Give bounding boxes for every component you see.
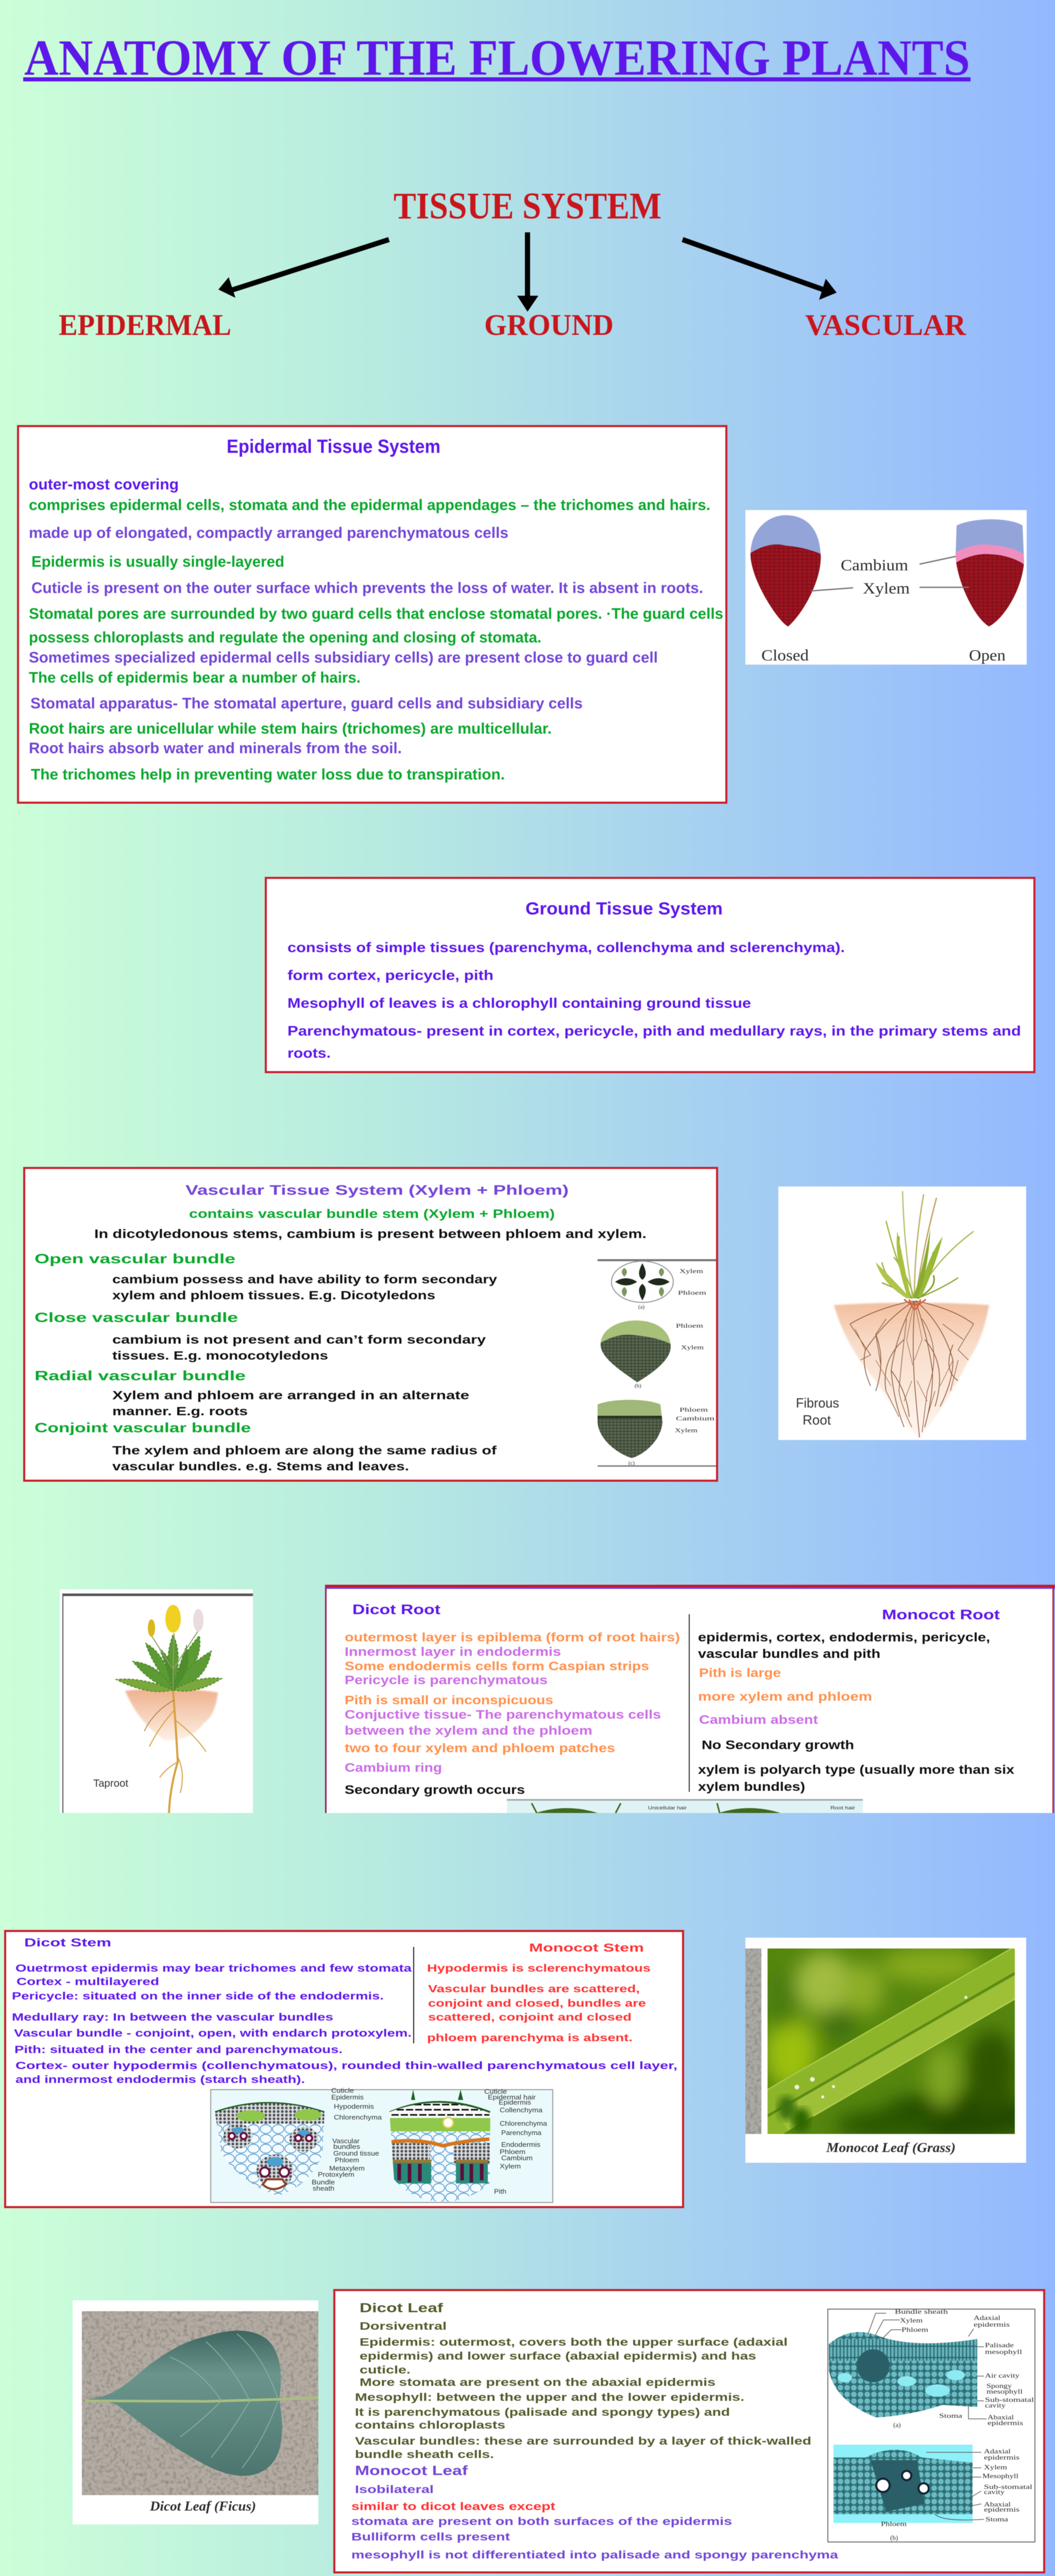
text block: monocot root: epidermis, cortex, endodermis, pericycle,	[698, 1631, 990, 1645]
text block: close vascular bundle	[35, 1310, 486, 1362]
image: monocot leaf (grass)	[745, 1938, 1041, 2163]
panel: epidermal tissue system	[18, 426, 726, 803]
labels: bundle parts: Closed	[761, 646, 809, 664]
diagram: conjoint bundle (c): Xylem	[675, 1427, 698, 1434]
gravel strip	[745, 1948, 761, 2134]
labels: dicot stem parts: Phloem	[335, 2156, 359, 2164]
text block: ground facts: form cortex, pericycle, pith	[287, 968, 494, 983]
diagram: stem cross sections	[211, 2087, 553, 2205]
panel: dicot and monocot root	[325, 1585, 1055, 1813]
diagram: radial bundle (a): (a)	[638, 1304, 645, 1310]
diagram: closed bundle (b): Xylem	[681, 1344, 704, 1351]
diagram: conjoint bundle (c): (c)	[628, 1460, 635, 1466]
diagram: leaf cross sections	[827, 2308, 1035, 2542]
text block: conjoint vascular bundle	[35, 1420, 497, 1473]
labels: section (b) parts: Stoma	[985, 2515, 1008, 2523]
text block: close vascular bundle: cambium is not present and can’t form secondary	[112, 1333, 486, 1346]
labels: section (b) parts: epidermis	[984, 2505, 1019, 2513]
text block: epidermal facts: Cuticle is present on the outer surface which prevents the loss of water. It is absent in roots.	[31, 580, 703, 597]
text block: epidermal facts: made up of elongated, compactly arranged parenchymatous cells	[29, 524, 508, 541]
text block: epidermal facts: Root hairs absorb water and minerals from the soil.	[29, 740, 402, 757]
labels: section (a) parts: Stoma	[939, 2412, 962, 2419]
text block: conjoint vascular bundle: The xylem and phloem are along the same radius of	[112, 1444, 497, 1457]
soil	[125, 1689, 218, 1740]
labels: section (a) parts: Spongy	[986, 2382, 1012, 2389]
section (a): dorsiventral leaf	[827, 2313, 986, 2419]
text block: monocot stem	[427, 1963, 651, 2044]
text block: monocot stem: phloem parenchyma is absent.	[427, 2032, 633, 2044]
text block: epidermal facts	[29, 476, 723, 783]
diagram: conjoint bundle (c): Cambium	[676, 1415, 715, 1422]
text block: dicot leaf: Dicot Leaf	[360, 2301, 444, 2315]
diagram: radial bundle (a): Xylem	[679, 1267, 704, 1275]
text block: dicot stem: Pericycle: situated on the inner side of the endodermis.	[12, 1991, 384, 2002]
text block: dicot leaf: epidermis) and lower surface (abaxial epidermis) and has	[360, 2350, 756, 2362]
text block: close vascular bundle: tissues. E.g. monocotyledons	[112, 1349, 328, 1362]
labels: monocot stem parts: Phloem	[500, 2148, 525, 2156]
labels: section (b) parts: Phloem	[881, 2520, 907, 2528]
text block: dicot stem: and innermost endodermis (starch sheath).	[15, 2074, 305, 2086]
labels: dicot stem parts: bundles	[333, 2143, 361, 2150]
panel: dicot and monocot leaf	[334, 2290, 1044, 2572]
image: dicot leaf (ficus)	[73, 2300, 318, 2524]
labels: monocot stem parts: Pith	[494, 2188, 506, 2195]
text block: epidermal facts: Sometimes specialized epidermal cells subsidiary cells) are present close to guard cell	[29, 649, 658, 666]
text block: monocot root: No Secondary growth	[702, 1738, 854, 1752]
labels: bundle parts: Xylem	[863, 579, 910, 597]
labels: monocot stem parts: Collenchyma	[500, 2106, 543, 2114]
diagram: vascular bundle types	[595, 1259, 716, 1467]
text block: dicot leaf: It is parenchymatous (palisade and spongy types) and	[355, 2406, 730, 2418]
diagram: closed bundle	[750, 515, 821, 627]
text block: close vascular bundle: Close vascular bundle	[35, 1310, 238, 1325]
text block: monocot root: xylem is polyarch type (usually more than six	[698, 1763, 1015, 1777]
labels: section (a) parts: epidermis	[974, 2320, 1010, 2328]
heading: dicot root: Dicot Root	[352, 1602, 440, 1617]
label: fibrous root: Fibrous	[796, 1395, 839, 1411]
labels: section (a) parts: epidermis	[988, 2419, 1023, 2427]
text block: dicot root: Innermost layer in endodermis	[345, 1645, 561, 1659]
labels: section (a) parts: Sub-stomatal	[985, 2396, 1034, 2403]
labels: section (b) parts: epidermis	[984, 2453, 1019, 2461]
text block: monocot leaf: Monocot Leaf	[355, 2463, 468, 2478]
labels: monocot stem parts: Epidermal hair	[488, 2093, 536, 2101]
text block: dicot stem: Cortex- outer hypodermis (collenchymatous), rounded thin-walled parenchymatous cell layer,	[15, 2060, 677, 2072]
section (b): isobilateral leaf	[833, 2445, 984, 2523]
text block: ground facts: Parenchymatous- present in cortex, pericycle, pith and medullary rays, in the primary stems and	[287, 1023, 1021, 1039]
diagram: radial bundle (a)	[611, 1261, 707, 1310]
labels: section (a) parts: Palisade	[985, 2341, 1014, 2349]
photo: grass blade	[765, 1946, 1041, 2143]
labels: section (b) parts: Xylem	[984, 2463, 1007, 2471]
text block: dicot leaf: Vascular bundles: these are surrounded by a layer of thick-walled	[355, 2435, 811, 2447]
image: fibrous root plant	[778, 1187, 1026, 1440]
diagram: root sections (cropped): Unicellular hair	[648, 1805, 687, 1810]
text block: open vascular bundle	[35, 1251, 497, 1302]
labels: dicot stem parts: Ground tissue	[333, 2149, 379, 2157]
text block: monocot stem: Hypodermis is sclerenchymatous	[427, 1963, 651, 1974]
text block: ground facts: roots.	[287, 1045, 331, 1061]
label: epidermal: EPIDERMAL	[59, 308, 231, 342]
labels: section (a) parts: Adaxial	[974, 2314, 1000, 2321]
arrow: to vascular	[683, 240, 837, 300]
labels: section (a) parts: Air cavity	[985, 2371, 1020, 2379]
text block: monocot leaf: similar to dicot leaves except	[351, 2501, 555, 2513]
text block: epidermal facts: outer-most covering	[29, 476, 179, 493]
labels: monocot stem parts: Endodermis	[501, 2141, 541, 2148]
monocot stem section	[386, 2092, 495, 2205]
labels: section (b) parts: Sub-stomatal	[984, 2483, 1033, 2490]
labels: section (b) parts	[881, 2447, 1033, 2541]
caption: Dicot Leaf (Ficus)	[149, 2499, 256, 2514]
text block: radial vascular bundle: manner. E.g. roots	[112, 1404, 248, 1418]
title: ANATOMY OF THE FLOWERING PLANTS	[24, 30, 970, 86]
labels: section (a) parts: Xylem	[900, 2316, 923, 2324]
text block: monocot root: more xylem and phloem	[698, 1690, 872, 1704]
labels: dicot stem parts: Chlorenchyma	[334, 2113, 382, 2121]
panel: vascular tissue system	[24, 1168, 717, 1481]
text block: monocot root: vascular bundles and pith	[698, 1647, 880, 1661]
labels: section (b) parts: Mesophyll	[982, 2472, 1018, 2480]
heading: monocot stem: Monocot Stem	[529, 1941, 644, 1954]
text block: dicot leaf: Dorsiventral	[360, 2320, 447, 2332]
text block: ground facts: consists of simple tissues (parenchyma, collenchyma and sclerenchyma).	[287, 940, 845, 955]
diagram: closed bundle (b): Phloem	[676, 1322, 704, 1329]
text block: dicot root: Cambium ring	[345, 1761, 442, 1775]
text block: monocot leaf: Isobilateral	[355, 2484, 434, 2496]
labels: dicot stem parts: Protoxylem	[318, 2171, 354, 2178]
labels: section (b) parts: cavity	[984, 2488, 1005, 2496]
text block: dicot root: Some endodermis cells form Caspian strips	[345, 1659, 649, 1673]
labels: section (b) parts: Adaxial	[984, 2447, 1011, 2455]
text block: radial vascular bundle	[35, 1368, 469, 1418]
arrow: to ground	[517, 232, 538, 312]
text block: dicot leaf	[355, 2301, 811, 2461]
labels: monocot stem parts: Chlorenchyma	[500, 2120, 548, 2127]
text block: dicot root: two to four xylem and phloem patches	[345, 1741, 615, 1755]
label: fibrous root	[796, 1395, 839, 1428]
photo: ficus leaf on gravel	[82, 2311, 318, 2495]
text block: dicot leaf: More stomata are present on the abaxial epidermis	[360, 2377, 716, 2388]
text block: dicot leaf: contains chloroplasts	[355, 2419, 505, 2431]
diagram: closed bundle (b): (b)	[635, 1383, 641, 1389]
text block: open vascular bundle: xylem and phloem tissues. E.g. Dicotyledons	[112, 1289, 435, 1302]
text: vascular intro	[94, 1207, 646, 1241]
flowers	[165, 1605, 181, 1633]
label: taproot: Taproot	[93, 1778, 128, 1789]
heading: monocot root: Monocot Root	[882, 1607, 1000, 1622]
labels: dicot stem parts: Metaxylem	[329, 2164, 365, 2172]
labels: section (a) parts: mesophyll	[986, 2387, 1023, 2395]
text block: epidermal facts: Stomatal pores are surrounded by two guard cells that enclose stomatal pores. ·The guard cells	[29, 605, 723, 622]
labels: section (b) parts: Abaxial	[984, 2500, 1011, 2508]
grass shoots	[876, 1191, 974, 1298]
labels: section (a) parts: cavity	[985, 2401, 1006, 2409]
label: ground: GROUND	[484, 308, 614, 342]
soil	[834, 1302, 989, 1438]
text block: dicot leaf: Mesophyll: between the upper and the lower epidermis.	[355, 2392, 744, 2403]
labels: monocot stem parts: Parenchyma	[501, 2129, 542, 2137]
text block: open vascular bundle: Open vascular bundle	[35, 1251, 235, 1266]
text block: monocot root: Pith is large	[699, 1666, 781, 1680]
text block: monocot root: Cambium absent	[699, 1713, 818, 1727]
labels: dicot stem parts: Cuticle	[331, 2087, 354, 2094]
text: vascular intro: contains vascular bundle stem (Xylem + Phloem)	[189, 1207, 555, 1221]
heading: epidermal tissue system: Epidermal Tissue System	[227, 436, 440, 457]
caption: Monocot Leaf (Grass)	[826, 2140, 956, 2155]
labels: dicot stem parts	[312, 2087, 382, 2192]
text: vascular intro: In dicotyledonous stems, cambium is present between phloem and xylem.	[94, 1227, 646, 1241]
text block: monocot leaf: mesophyll is not differentiated into palisade and spongy parenchyma	[351, 2549, 838, 2561]
text block: epidermal facts: Root hairs are unicellular while stem hairs (trichomes) are multicellular.	[29, 720, 552, 737]
text block: ground facts: Mesophyll of leaves is a chlorophyll containing ground tissue	[287, 995, 751, 1011]
text block: dicot stem	[12, 1963, 677, 2086]
labels: dicot stem parts: Epidermis	[331, 2093, 364, 2101]
labels: dicot stem parts: Hypodermis	[334, 2103, 375, 2110]
labels: dicot stem parts: Vascular	[332, 2137, 360, 2145]
text block: epidermal facts: The trichomes help in preventing water loss due to transpiration.	[31, 766, 505, 783]
labels: bundle parts: Open	[969, 646, 1006, 664]
text block: epidermal facts: comprises epidermal cells, stomata and the epidermal appendages – the trichomes and hairs.	[29, 497, 710, 514]
text block: epidermal facts: possess chloroplasts and regulate the opening and closing of stomata.	[29, 629, 541, 646]
leaves	[116, 1635, 222, 1691]
labels: section (a) parts	[893, 2308, 1034, 2429]
text block: dicot root: outermost layer is epiblema (form of root hairs)	[345, 1631, 680, 1645]
arrow: to epidermal	[218, 240, 389, 298]
heading: tissue system: TISSUE SYSTEM	[394, 185, 661, 227]
text block: monocot root	[698, 1631, 1015, 1794]
heading: dicot stem: Dicot Stem	[24, 1936, 111, 1949]
text block: dicot root	[345, 1631, 680, 1797]
text block: dicot root: Conjuctive tissue- The parenchymatous cells	[345, 1708, 661, 1722]
text block: epidermal facts: The cells of epidermis bear a number of hairs.	[29, 669, 361, 686]
labels: monocot stem parts: Epidermis	[499, 2098, 532, 2106]
panel: ground tissue system	[266, 878, 1034, 1072]
text block: monocot leaf: stomata are present on both surfaces of the epidermis	[351, 2516, 732, 2528]
text block: conjoint vascular bundle: vascular bundles. e.g. Stems and leaves.	[112, 1460, 409, 1473]
labels: dicot stem parts: Bundle	[312, 2178, 335, 2186]
diagram: radial bundle (a): Phloem	[678, 1289, 707, 1296]
label: fibrous root: Root	[803, 1412, 831, 1428]
labels: section (a) parts: (a)	[893, 2421, 900, 2429]
labels: monocot stem parts: Cuticle	[484, 2088, 507, 2095]
image: closed and open vascular bundles	[745, 510, 1028, 665]
heading: vascular tissue system: Vascular Tissue System (Xylem + Phloem)	[185, 1182, 569, 1198]
text block: monocot root: xylem bundles)	[698, 1780, 805, 1794]
text block: dicot root: between the xylem and the phloem	[345, 1724, 592, 1738]
labels: section (a) parts: Bundle sheath	[895, 2308, 948, 2315]
text block: dicot stem: Ouetrmost epidermis may bear trichomes and few stomata	[15, 1963, 412, 1974]
diagram: open bundle	[955, 519, 1025, 627]
text block: dicot leaf: bundle sheath cells.	[355, 2449, 494, 2461]
text block: monocot stem: conjoint and closed, bundles are	[428, 1998, 646, 2009]
heading: ground tissue system: Ground Tissue System	[525, 899, 723, 919]
text block: dicot stem: Vascular bundle - conjoint, open, with endarch protoxylem.	[14, 2028, 412, 2039]
text block: ground facts	[287, 940, 1021, 1061]
text block: dicot stem: Medullary ray: In between the vascular bundles	[12, 2012, 333, 2023]
image: taproot plant	[60, 1589, 253, 1813]
labels: section (b) parts: (b)	[890, 2534, 898, 2541]
diagram: root sections (cropped): Root hair	[830, 1805, 855, 1810]
diagram: closed bundle (b)	[598, 1319, 704, 1389]
labels: bundle parts: Cambium	[841, 556, 908, 574]
text block: conjoint vascular bundle: Conjoint vascular bundle	[35, 1420, 251, 1435]
text block: monocot leaf: Bulliform cells present	[351, 2531, 510, 2543]
labels: monocot stem parts	[484, 2088, 548, 2195]
labels: dicot stem parts: sheath	[313, 2184, 334, 2192]
text block: dicot root: Pith is small or inconspicuous	[345, 1693, 553, 1707]
roots	[850, 1301, 974, 1437]
labels: section (a) parts: Phloem	[901, 2326, 928, 2333]
panel: dicot and monocot stem	[5, 1931, 683, 2207]
text block: radial vascular bundle: Xylem and phloem are arranged in an alternate	[112, 1388, 469, 1402]
text block: dicot root: Secondary growth occurs	[345, 1783, 525, 1797]
labels: bundle parts	[761, 556, 1006, 664]
text block: dicot stem: Pith: situated in the center and parenchymatous.	[14, 2044, 343, 2056]
text block: monocot stem: Vascular bundles are scattered,	[428, 1984, 640, 1995]
text block: monocot stem: scattered, conjoint and closed	[428, 2012, 632, 2023]
text block: radial vascular bundle: Radial vascular bundle	[35, 1368, 246, 1383]
dicot stem section	[211, 2092, 330, 2200]
labels: section (a) parts: mesophyll	[985, 2348, 1023, 2355]
text block: open vascular bundle: cambium possess and have ability to form secondary	[112, 1273, 497, 1286]
text block: dicot leaf: Epidermis: outermost, covers both the upper surface (adaxial	[360, 2336, 788, 2348]
text block: dicot leaf: cuticle.	[360, 2364, 411, 2376]
text block: epidermal facts: Stomatal apparatus- The stomatal aperture, guard cells and subsidiary cells	[30, 695, 583, 712]
labels: monocot stem parts: Cambium	[501, 2154, 533, 2162]
diagram: conjoint bundle (c): Phloem	[679, 1406, 708, 1413]
text block: dicot root: Pericycle is parenchymatous	[345, 1673, 548, 1687]
text block: dicot stem: Cortex - multilayered	[16, 1976, 159, 1988]
labels: monocot stem parts: Xylem	[500, 2162, 521, 2170]
labels: section (a) parts: Abaxial	[988, 2413, 1014, 2421]
diagram: root sections (cropped)	[507, 1799, 863, 1813]
diagram: conjoint bundle (c)	[595, 1398, 715, 1466]
text block: epidermal facts: Epidermis is usually single-layered	[31, 553, 284, 570]
label: vascular: VASCULAR	[805, 308, 966, 342]
text block: monocot leaf	[351, 2463, 838, 2561]
taproot	[144, 1691, 206, 1813]
